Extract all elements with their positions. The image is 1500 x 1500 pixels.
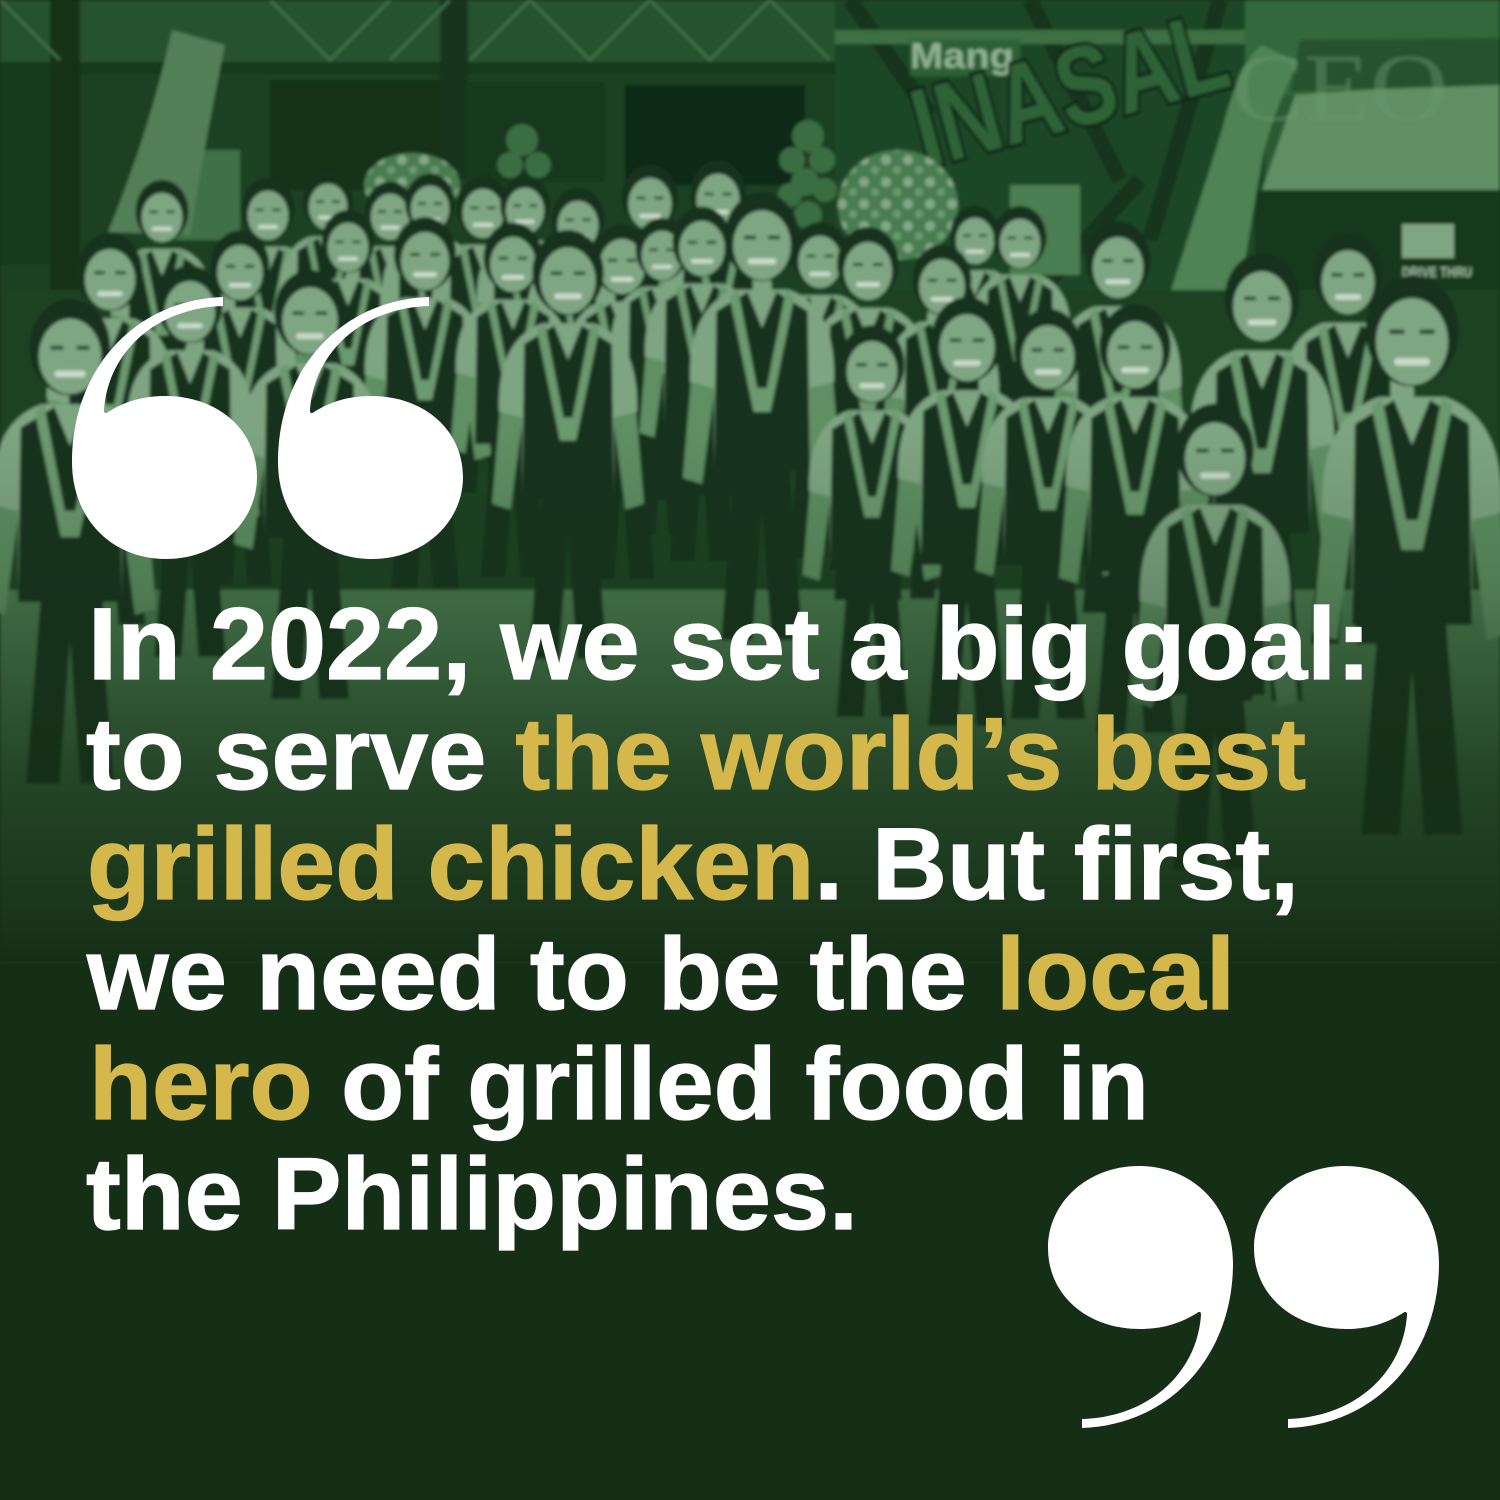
building facade bbox=[0, 0, 840, 300]
restaurant sign bbox=[835, 0, 1265, 290]
restaurant sign: Mang bbox=[910, 35, 1014, 76]
watermark: CEO bbox=[1232, 34, 1448, 141]
fade into dark green bbox=[0, 430, 1500, 962]
people group bbox=[0, 160, 1500, 960]
quote text bbox=[86, 587, 1371, 1251]
background photo: team in front of restaurant bbox=[0, 0, 1500, 960]
quote text: grilled chicken. But first, bbox=[87, 807, 1299, 921]
quote text: we need to be the local bbox=[86, 917, 1235, 1031]
inflatable arch left bbox=[108, 30, 225, 235]
flower arrangements bbox=[364, 150, 958, 260]
tent and sky bbox=[1245, 0, 1500, 290]
quote text: In 2022, we set a big goal: bbox=[88, 587, 1371, 701]
quote text: to serve the world’s best bbox=[86, 697, 1306, 811]
quote text: the Philippines. bbox=[86, 1137, 858, 1251]
balloons bbox=[497, 120, 837, 229]
closing quote mark icon bbox=[1048, 1166, 1439, 1428]
quote text: hero of grilled food in bbox=[89, 1027, 1149, 1141]
inflatable arch right bbox=[1168, 45, 1298, 310]
opening quote mark icon bbox=[72, 297, 463, 559]
tent and sky: DRIVE THRU bbox=[1402, 264, 1472, 281]
